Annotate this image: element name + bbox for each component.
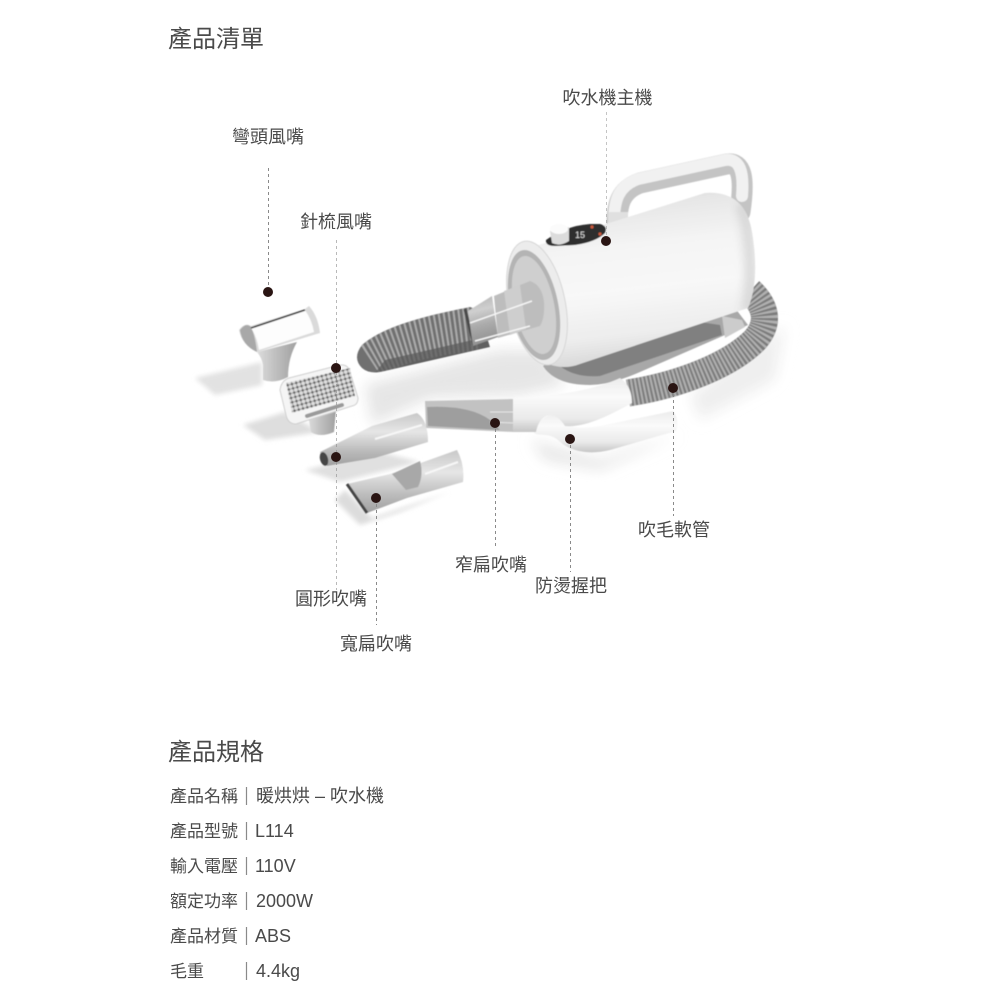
specification list: L114 [255,821,294,841]
part labels: 防燙握把 [535,575,607,596]
control knob [550,227,569,245]
specification list: 110V [255,856,296,876]
part labels: 吹毛軟管 [638,520,710,540]
narrow flat nozzle [425,399,514,432]
specification list: 毛重 [170,962,204,981]
part labels: 吹水機主機 [562,88,652,108]
specification list: 產品材質 [170,927,238,946]
carry handle [608,160,742,228]
front air outlet [499,245,569,365]
wide flat nozzle [347,450,463,513]
specification list: 2000W [256,891,313,911]
heading: product specifications: 產品規格 [168,739,264,766]
round nozzle [318,413,428,467]
main unit body: 15 [575,230,585,240]
specification list: 產品名稱 [170,787,238,806]
infographic canvas [168,26,781,981]
specification list: 產品型號 [170,822,238,841]
product illustration [195,160,785,525]
comb nozzle [280,365,358,435]
blower hose [628,291,764,393]
part labels: 彎頭風嘴 [232,127,304,147]
specification list: ABS [255,926,291,946]
bristles [286,368,355,413]
air hose to main unit [357,307,490,373]
main unit body [497,193,760,370]
part labels: 寬扁吹嘴 [340,634,412,654]
part labels: 針梳風嘴 [300,212,372,232]
specification list [170,786,384,981]
part labels [232,88,710,654]
specification list: 輸入電壓 [170,857,238,876]
specification list: 額定功率 [170,892,238,911]
specification list: 4.4kg [256,961,300,981]
control panel [546,224,606,246]
callout lines [268,112,674,625]
curved nozzle [239,306,320,381]
base plate [543,308,748,385]
anti-scald grip [513,378,677,452]
callout dots [263,236,678,503]
heading: product list: 產品清單 [168,26,264,53]
part labels: 圓形吹嘴 [295,589,367,609]
floor shadows [195,325,785,525]
part labels: 窄扁吹嘴 [455,555,527,575]
specification list: 暖烘烘 – 吹水機 [256,786,384,806]
hose connector [468,281,544,346]
